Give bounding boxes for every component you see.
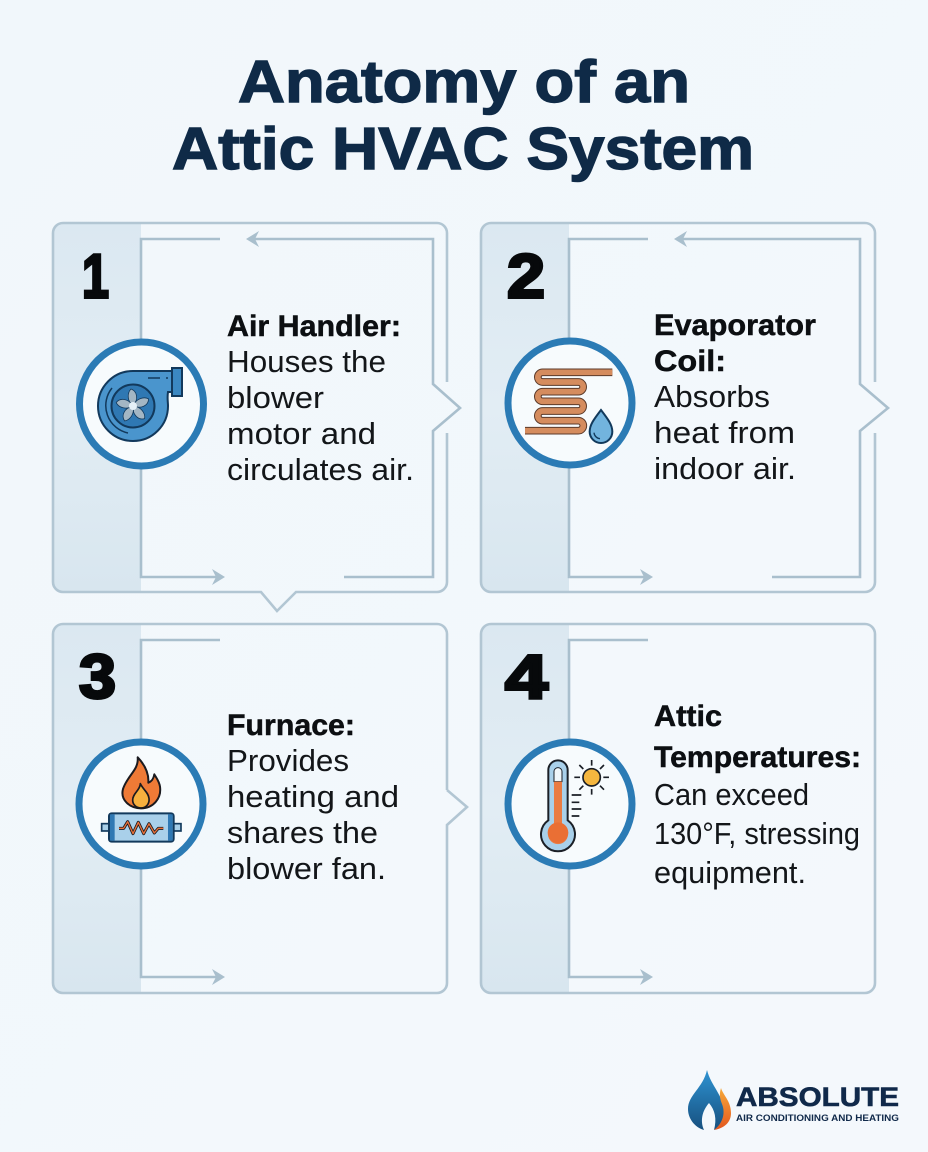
text: evaporator coil: Evaporator [654, 309, 816, 342]
text: furnace: heating and [227, 779, 399, 814]
title: Anatomy of an [238, 49, 690, 115]
text: air handler: Houses the [227, 344, 386, 379]
panel 4: attic temperatures [481, 624, 875, 993]
text: attic temperatures: Can exceed [654, 777, 809, 812]
panel 3: furnace [53, 624, 467, 993]
text: air handler: circulates air. [227, 452, 414, 487]
title [172, 49, 754, 182]
text: attic temperatures: 130°F, stressing [654, 816, 860, 851]
text: air handler: Air Handler: [227, 310, 401, 343]
panel 1: air handler [53, 223, 460, 611]
text: air handler: motor and [227, 416, 376, 451]
text: air handler [227, 310, 414, 487]
text: attic temperatures [654, 700, 861, 890]
icon: thermometer and sun [508, 742, 632, 866]
text: furnace: Furnace: [227, 709, 355, 742]
icon: coil and water drop [508, 341, 632, 465]
number 4: 4 [505, 643, 549, 712]
icon: logo flame [688, 1070, 731, 1130]
logo: Absolute Air Conditioning and Heating [688, 1070, 899, 1130]
text: furnace: shares the [227, 815, 378, 850]
icon: blower [80, 342, 204, 466]
panel 2: evaporator coil [481, 223, 888, 592]
number 3: 3 [79, 643, 116, 712]
text: furnace [227, 709, 399, 886]
title: Attic HVAC System [172, 116, 754, 182]
text: evaporator coil: heat from [654, 415, 795, 450]
text: evaporator coil: indoor air. [654, 451, 796, 486]
icon: furnace flame [79, 742, 203, 866]
text: furnace: blower fan. [227, 851, 386, 886]
text: evaporator coil [654, 309, 816, 486]
text: attic temperatures: Temperatures: [654, 741, 861, 774]
number 1: 1 [82, 242, 109, 312]
text: evaporator coil: Coil: [654, 345, 726, 378]
number 2: 2 [507, 242, 545, 312]
text: attic temperatures: equipment. [654, 855, 806, 890]
text: air handler: blower [227, 380, 324, 415]
text: logo tagline: AIR CONDITIONING AND HEATING [736, 1113, 899, 1124]
text: logo wordmark: ABSOLUTE [736, 1082, 899, 1112]
text: evaporator coil: Absorbs [654, 379, 770, 414]
text: furnace: Provides [227, 743, 349, 778]
text: attic temperatures: Attic [654, 700, 722, 733]
